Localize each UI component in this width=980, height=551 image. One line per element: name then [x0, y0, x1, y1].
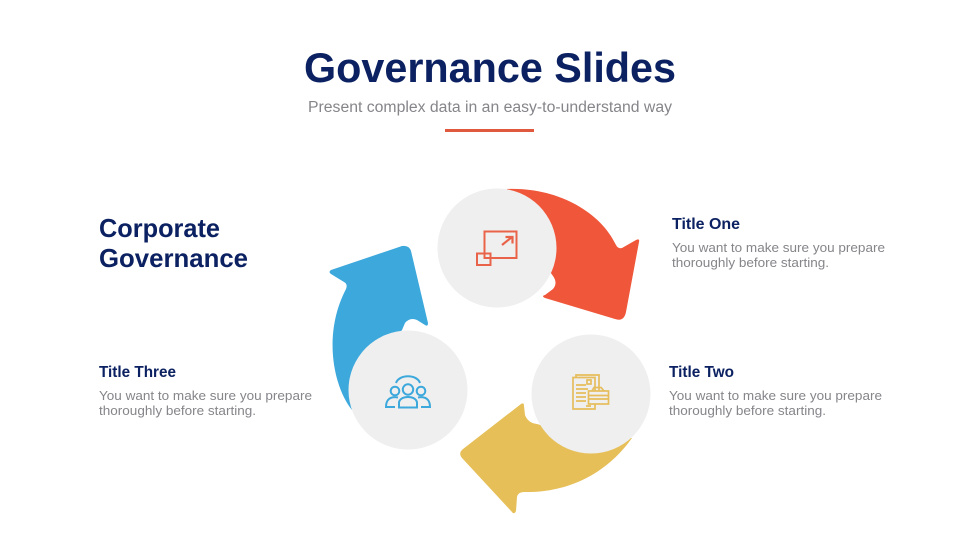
text block: Title Three: thoroughly before starting.	[99, 403, 256, 418]
text block: Title Two	[669, 364, 882, 418]
heading: Corporate Governance	[99, 213, 248, 273]
arrow: blue	[330, 246, 428, 410]
text block: Title One: thoroughly before starting.	[672, 255, 829, 270]
heading: Corporate Governance: Corporate	[99, 213, 220, 243]
text block: Title Two: You want to make sure you prepare	[669, 388, 882, 403]
text block: Title Three: Title Three	[99, 364, 176, 381]
text block: Title One: You want to make sure you prepare	[672, 240, 885, 255]
circle: top with expand icon	[438, 188, 556, 308]
title underline	[445, 129, 534, 132]
text block: Title Three	[99, 364, 312, 418]
circle: left with people icon	[348, 330, 468, 450]
arrow: red	[507, 189, 639, 320]
icon: expand	[477, 232, 516, 265]
arrow: yellow	[460, 403, 632, 513]
title: Governance Slides	[304, 44, 676, 91]
text block: Title One	[672, 216, 885, 270]
heading: Corporate Governance: Governance	[99, 243, 248, 273]
text block: Title One: Title One	[672, 216, 740, 233]
icon: people	[386, 376, 430, 408]
subtitle: Present complex data in an easy-to-understand way	[308, 99, 672, 116]
text block: Title Two: thoroughly before starting.	[669, 403, 826, 418]
text block: Title Three: You want to make sure you prepare	[99, 388, 312, 403]
text block: Title Two: Title Two	[669, 364, 734, 381]
icon: document and card	[573, 375, 608, 409]
circle: right with document icon	[532, 334, 650, 454]
